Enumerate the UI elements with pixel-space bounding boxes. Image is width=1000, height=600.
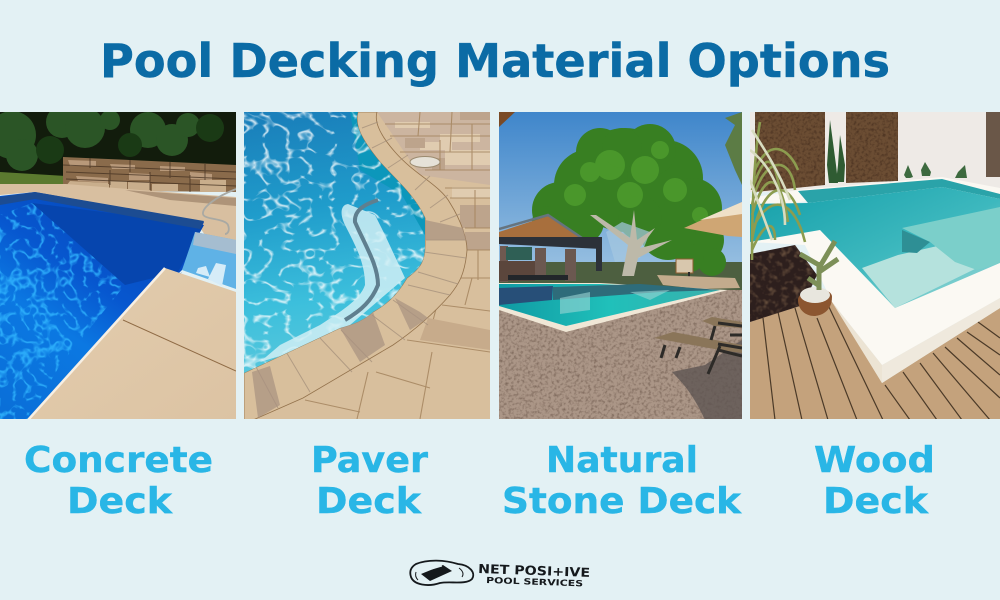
darker coping bricks bbox=[252, 220, 466, 418]
label: concrete deck bbox=[24, 440, 213, 522]
white coping deck bbox=[750, 230, 1000, 383]
logo wordmark: POOL SERVICES bbox=[486, 576, 583, 589]
pool water bbox=[244, 112, 434, 377]
label: concrete deck: Deck bbox=[67, 481, 173, 522]
panel: natural stone deck photo bbox=[499, 112, 742, 420]
icon: pool with float bbox=[410, 561, 473, 585]
stone paving bbox=[499, 288, 742, 420]
swimming pool bbox=[499, 283, 728, 332]
shallow shelf bbox=[902, 207, 1000, 270]
water deep shadow bbox=[32, 203, 204, 285]
potted cactus bbox=[798, 241, 838, 316]
pool coping and tile bbox=[750, 177, 1000, 204]
label: paver deck bbox=[311, 440, 428, 522]
trees background bbox=[0, 112, 236, 184]
label: wood deck bbox=[814, 440, 935, 522]
small potted plants bbox=[904, 162, 967, 178]
patio umbrella bbox=[684, 202, 742, 237]
paver surface bbox=[244, 112, 490, 419]
label: natural stone deck: Natural bbox=[546, 440, 698, 481]
pergola bbox=[499, 215, 602, 282]
stone wall panels bbox=[755, 112, 1000, 192]
eave corner bbox=[499, 112, 515, 127]
lounge chairs bbox=[654, 317, 742, 374]
sky bbox=[499, 112, 742, 262]
panel: paver deck photo bbox=[244, 112, 490, 420]
large grass plant bbox=[750, 122, 805, 260]
label: natural stone deck: Stone Deck bbox=[502, 481, 742, 522]
pool steps bbox=[182, 232, 236, 289]
label: concrete deck: Concrete bbox=[24, 440, 213, 481]
top right branch foliage bbox=[725, 112, 742, 185]
tree bbox=[532, 124, 726, 276]
label: wood deck: Deck bbox=[823, 481, 929, 522]
pool water bbox=[750, 187, 1000, 309]
light shallow water bbox=[862, 242, 977, 308]
boulder bbox=[657, 275, 740, 289]
white wall bbox=[750, 112, 1000, 192]
near concrete deck bbox=[28, 268, 236, 420]
curved pool step bbox=[260, 204, 405, 362]
label: paver deck: Paver bbox=[311, 440, 428, 481]
title: Pool Decking Material Options bbox=[100, 34, 890, 88]
label: natural stone deck bbox=[502, 440, 742, 522]
water caustics bbox=[0, 200, 130, 420]
logo wordmark: NET POSI+IVE bbox=[478, 561, 590, 580]
background hedge bbox=[499, 262, 742, 292]
panel: concrete deck photo bbox=[0, 106, 236, 420]
drain cover bbox=[410, 156, 440, 168]
cypress plants bbox=[827, 120, 845, 183]
far pool deck bbox=[0, 184, 236, 240]
mulch bed bbox=[750, 245, 817, 322]
pool water bbox=[0, 192, 204, 420]
label: wood deck: Wood bbox=[814, 440, 935, 481]
curved coping bbox=[244, 112, 467, 420]
basketball hoop bbox=[676, 258, 694, 276]
label: paver deck: Deck bbox=[316, 481, 422, 522]
handrail bbox=[203, 189, 236, 234]
panel: wood deck photo bbox=[750, 112, 1000, 420]
wood deck bbox=[750, 300, 1000, 420]
logo wordmark bbox=[478, 561, 590, 589]
logo: net positive pool services bbox=[410, 561, 590, 589]
pool tile band bbox=[0, 192, 204, 229]
stone retaining wall bbox=[63, 157, 236, 192]
